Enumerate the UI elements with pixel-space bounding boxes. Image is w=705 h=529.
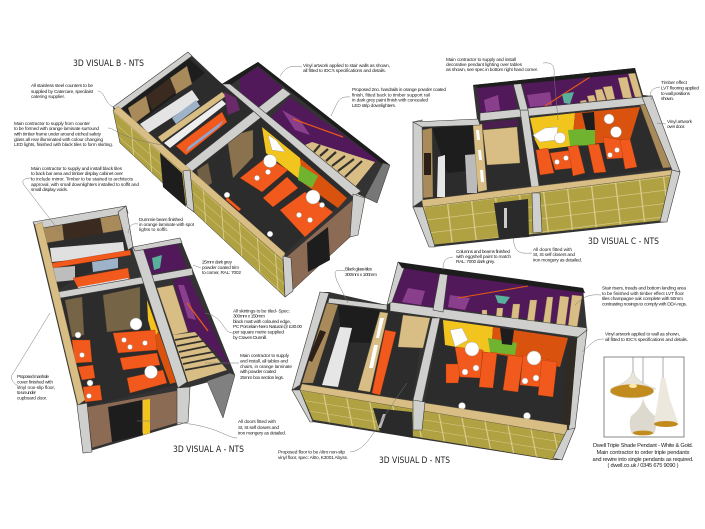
side trim A <box>35 222 85 405</box>
note: manhole: to run under <box>17 390 36 396</box>
note: stair risers: Stair risers, treads and bottom landing area <box>602 286 686 292</box>
caption: pendant spec: ( dwell.co.uk / 0345 675 9090 ) <box>608 463 679 469</box>
note: doors C: iron mongery as detailed. <box>533 258 582 264</box>
panel: 3D visual A <box>33 206 235 453</box>
note: skirtings: by Craven Dunnill. <box>233 335 267 341</box>
note: dark grey trim: powder coated trim <box>202 265 239 271</box>
note: dummie beam: lights to soffit. <box>139 227 168 233</box>
note: timber effect: Timber effect <box>661 80 688 86</box>
note: tables and chairs: Main contractor to supply <box>240 353 290 359</box>
panel: 3D visual B <box>113 52 390 297</box>
seating room C <box>530 103 675 185</box>
end wall B <box>283 163 390 297</box>
note: pendant lighting: Main contractor to supply and install <box>446 57 516 63</box>
note: back bar tiles: approval, with small downlighters installed to soffit and <box>31 182 139 188</box>
title: visual A: 3D VISUAL A - NTS <box>173 445 244 455</box>
note: stair risers: to be finished with timber effect LVT floor <box>602 291 684 297</box>
front wall B <box>113 106 285 297</box>
note: front counter: Main contractor to supply from counter <box>14 121 90 127</box>
note: skirtings: per square metre supplied <box>233 330 284 336</box>
note: tables and chairs: with powder coated <box>240 369 276 375</box>
note: manhole: cupboard door. <box>17 396 47 402</box>
note: doors C: All doors fitted with <box>533 247 572 253</box>
note: columns and beams: with eggshell paint to match <box>456 254 511 260</box>
base D <box>292 262 587 460</box>
title: visual B: 3D VISUAL B - NTS <box>73 59 144 69</box>
note: dummie beam: in orange laminate with spot <box>139 222 195 228</box>
concrete beams C <box>413 68 680 207</box>
note: tables and chairs: chairs, in orange laminate <box>240 364 292 370</box>
note: handrails: Proposed 2no. handrails in orange powder coated <box>352 87 446 93</box>
note: skirtings: PC Porcelain-Nero Natural @ £30.00 <box>233 324 302 330</box>
note: tables and chairs: and install, all tables and <box>240 358 288 364</box>
concrete beams A <box>33 206 193 388</box>
note: vinyl over door: Vinyl artwork <box>667 119 693 125</box>
note: skirtings: 300mm x 150mm <box>233 314 265 320</box>
note: proposed floor: vinyl floor, spec: Altro, K3001 Abyss. <box>278 455 348 461</box>
note: skirtings: All skirtings to be tiled- Spec: <box>233 308 290 314</box>
caption: pendant spec: Main contractor to order triple pendants <box>596 450 690 456</box>
title: visual C: 3D VISUAL C - NTS <box>588 237 659 247</box>
note: front counter: with timber frame under around etched safety <box>14 132 102 138</box>
note: handrails: LED strip downlighters. <box>352 103 396 109</box>
note: wall vinyl: Vinyl artwork applied to wall as shown, <box>605 332 680 338</box>
note: stair vinyl: Vinyl artwork applied to stair walls as shown, <box>303 63 390 69</box>
note: stainless counters: catering supplier. <box>31 94 65 100</box>
note: manhole: Proposed manhole <box>17 374 49 380</box>
panel: 3D visual D <box>292 262 587 460</box>
bar room D <box>300 300 430 400</box>
note: timber effect: LVT flooring applied <box>661 86 699 92</box>
concrete beams D <box>292 262 587 437</box>
note: manhole: cover finished with <box>17 380 53 386</box>
note: doors A: St, St self closers and <box>238 425 279 431</box>
note: doors A: iron mongery as detailed. <box>238 430 286 436</box>
caption: pendant spec: and rewire into single pendants as required. <box>592 457 694 463</box>
note: front counter: LED lights, finished with black tiles to form skirting. <box>14 142 113 148</box>
note: stair vinyl: all fitted to IDC's specifications and details. <box>303 68 386 74</box>
note: black glass tiles: Black glass tiles <box>345 266 373 272</box>
note: vinyl over door: over door. <box>667 124 685 130</box>
note: doors C: St, St self closers and <box>533 252 575 258</box>
note: timber effect: to wall positions <box>661 91 691 97</box>
stair area B <box>240 67 378 187</box>
note: stair risers: tiles champagne oak complete with 50mm <box>602 296 683 302</box>
note: back bar tiles: to back bar area and timber display cabinet over <box>31 171 123 177</box>
note: black glass tiles: 300mm x 100mm <box>345 272 377 278</box>
note: tables and chairs: 25mm box section legs. <box>240 375 284 381</box>
seating room D <box>425 320 575 425</box>
stair area C <box>477 72 642 113</box>
seating room A <box>60 283 177 407</box>
note: dark grey trim: to corner, RAL: 7002 <box>202 270 241 276</box>
panel: 3D visual C <box>413 68 680 247</box>
icon: pendant lamps photo <box>604 357 684 437</box>
note: stair risers: contrasting nosings to comply with DDA regs. <box>602 302 687 308</box>
front wall C <box>413 170 680 247</box>
title: visual D: 3D VISUAL D - NTS <box>379 456 450 466</box>
note: wall vinyl: all fitted to IDC's specifications and details. <box>605 337 688 343</box>
bar room C <box>422 118 532 200</box>
note: timber effect: shown. <box>661 96 674 102</box>
caption: pendant spec: Dwell Triple Shade Pendant - White & Gold. <box>593 443 693 449</box>
note: handrails: in dark grey paint finish with concealed <box>352 98 428 104</box>
note: columns and beams: RAL: 7000 dark grey. <box>456 259 495 265</box>
note: dummie beam: Dummie beam finished <box>139 217 183 223</box>
base C <box>413 68 680 247</box>
note: stainless counters: supplied by Catercare, specilaist <box>31 89 94 95</box>
note: skirtings: black matt with coloured edge, <box>233 319 291 325</box>
leader lines <box>12 63 666 452</box>
note: pendant lighting: as shown, see spec in bottom right hand corner. <box>446 67 538 73</box>
concrete beams B <box>113 52 390 197</box>
stair area A <box>142 242 230 382</box>
note: back bar tiles: Main contractor to supply and install black tiles <box>31 166 123 172</box>
base A <box>33 206 235 453</box>
end wall A <box>77 373 235 453</box>
bar room B <box>118 56 258 167</box>
note: dark grey trim: 25mm dark grey <box>202 260 233 266</box>
note: stainless counters: All stainless steel counters to be <box>31 83 93 89</box>
rear and floor base <box>113 52 390 297</box>
note: front counter: to be formed with orange laminate surround <box>14 126 99 132</box>
note: handrails: finish, fitted back to timber support rail <box>352 92 430 98</box>
note: front counter: glass all rear illuminated with colour changing <box>14 137 103 143</box>
note: back bar tiles: small display voids. <box>31 187 68 193</box>
note: proposed floor: Proposed floor to be Altro non-slip <box>278 450 345 456</box>
note: doors A: All doors fitted with <box>238 419 276 425</box>
stair area D <box>392 268 583 328</box>
seating room B <box>190 113 350 255</box>
note: manhole: vinyl non-slip floor, <box>17 385 55 391</box>
note: pendant lighting: decorative pendant lighting over tables <box>446 62 523 68</box>
bar room A <box>40 212 131 293</box>
note: back bar tiles: to include mirror. Timber to be stained to architects <box>31 176 134 182</box>
note: columns and beams: Columns and beams finished <box>456 249 510 255</box>
front wall D <box>292 384 575 460</box>
